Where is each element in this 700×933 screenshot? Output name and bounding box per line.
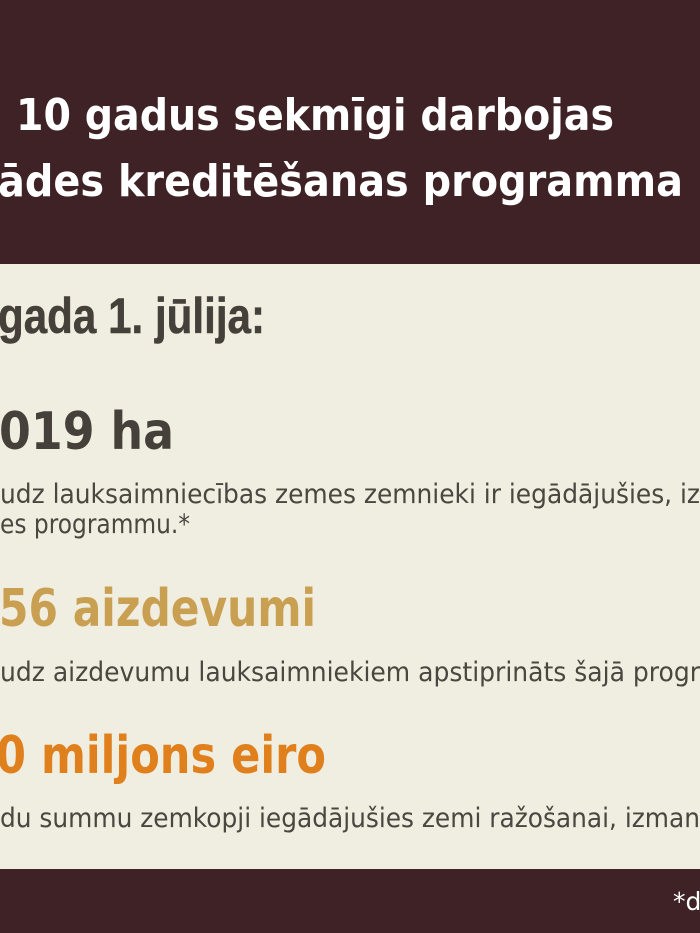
title: 10 gadus sekmīgi darbojas (16, 90, 614, 141)
statistic: million euro (0, 726, 700, 834)
statistic: hectares (0, 402, 700, 540)
hectares description: es programmu.* (0, 509, 190, 540)
footer band (0, 869, 700, 933)
panel: main content background (0, 264, 700, 869)
statistic: loans (0, 579, 700, 688)
loans value: 56 aizdevumi (0, 579, 316, 639)
hectares description (0, 479, 700, 540)
section heading: gada 1. jūlija: (0, 288, 265, 344)
title (0, 90, 683, 207)
hectares value: 019 ha (0, 402, 174, 462)
header band (0, 0, 700, 264)
euro value: 0 miljons eiro (0, 726, 326, 786)
